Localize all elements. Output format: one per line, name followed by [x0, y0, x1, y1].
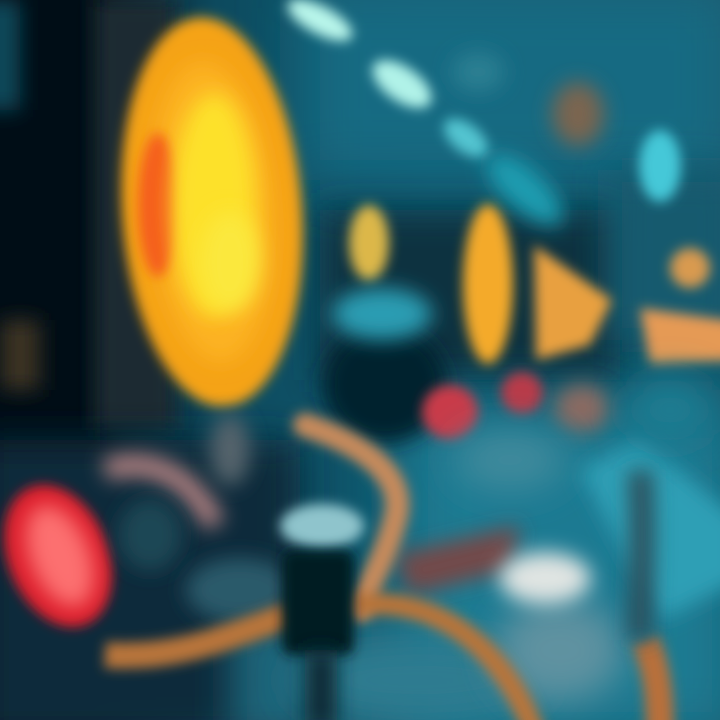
faint panel, left edge	[0, 320, 40, 390]
red glowing capsule	[0, 469, 132, 643]
red dots	[422, 372, 610, 439]
copper cables	[105, 425, 660, 720]
row of orange bars	[349, 204, 720, 364]
streaks of light, upper right	[282, 0, 710, 288]
dark dome with teal cap	[323, 288, 447, 443]
dark cylinder	[282, 550, 354, 720]
teal shapes, lower right	[290, 378, 720, 720]
muted pink strokes, lower left	[105, 414, 294, 622]
large glowing coin	[109, 11, 315, 413]
pale paper form	[280, 504, 591, 604]
